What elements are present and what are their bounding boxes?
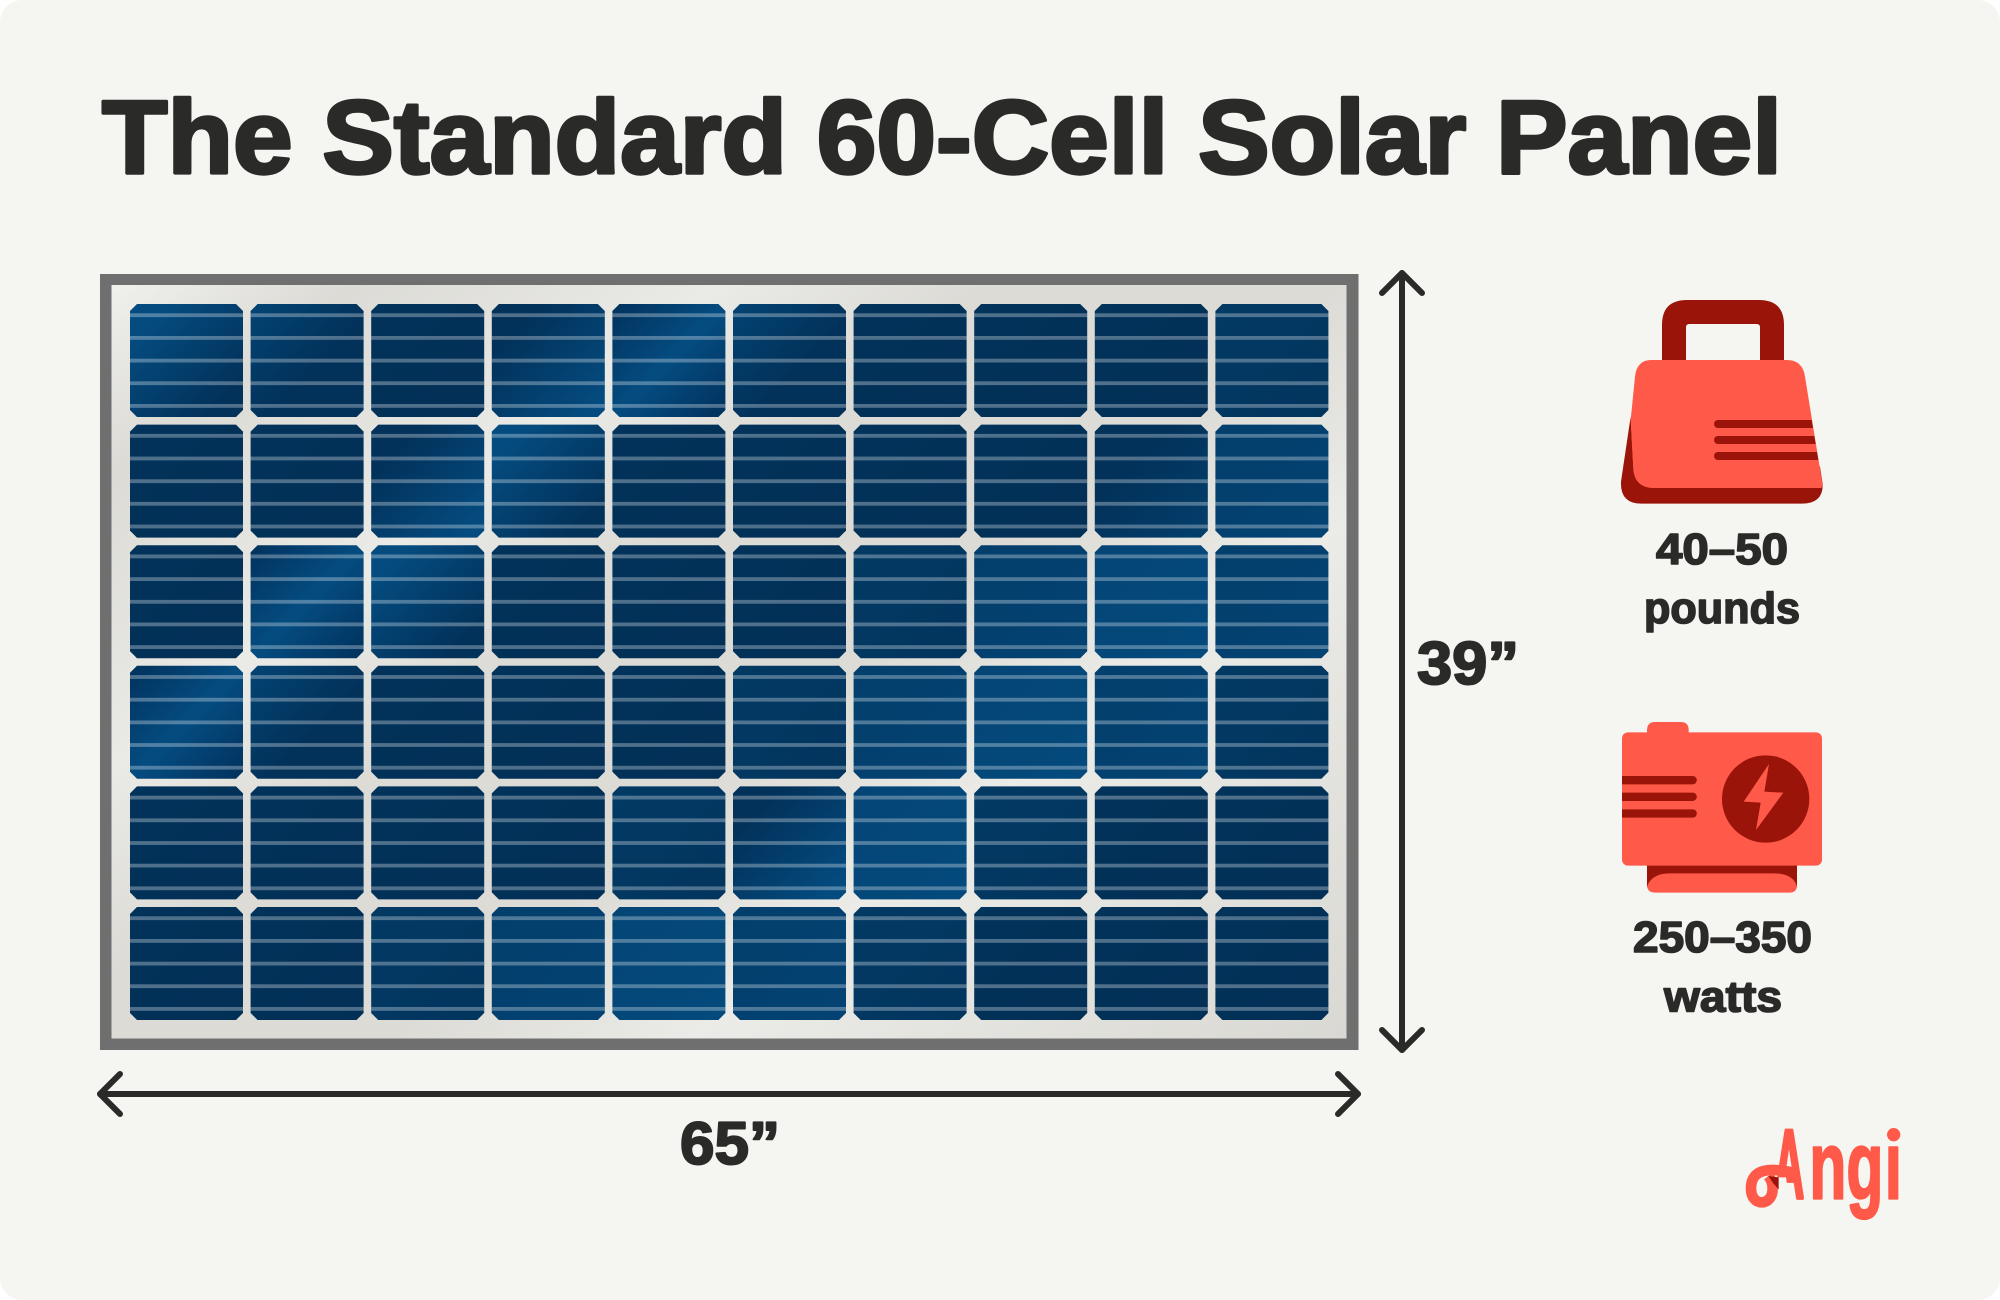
- solar panel: [100, 274, 1358, 1050]
- label: height 39 inches: 39”: [1417, 630, 1519, 697]
- logo: Angi: [1751, 1110, 1902, 1220]
- solar cells grid: [130, 304, 1328, 1020]
- weight value: 40–50: [1656, 525, 1788, 574]
- logo: Angi: ı: [1885, 1112, 1902, 1220]
- logo: Angi: ng: [1809, 1112, 1883, 1220]
- logo: Angi: A: [1774, 1110, 1804, 1218]
- label: width 65 inches: 65”: [680, 1110, 780, 1177]
- icon: weight: [1621, 300, 1823, 504]
- icon: generator: [1622, 722, 1822, 893]
- title: The Standard 60-Cell Solar Panel: [102, 80, 1782, 196]
- arrow: width dimension: [100, 1074, 1358, 1114]
- power unit: watts: [1663, 972, 1782, 1022]
- power value: 250–350: [1633, 913, 1812, 962]
- weight unit: pounds: [1644, 584, 1800, 633]
- panel frame: [100, 274, 1358, 1050]
- arrow: height dimension: [1382, 273, 1422, 1050]
- panel backing: [112, 285, 1346, 1038]
